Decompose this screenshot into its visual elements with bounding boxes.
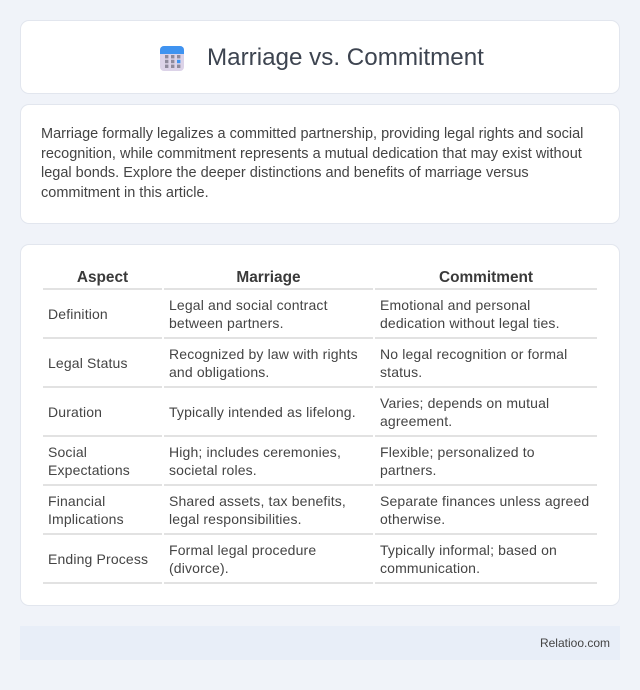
row: Legal Status: Recognized by law with rights	[169, 346, 358, 362]
title: Marriage vs. Commitment	[207, 44, 484, 71]
row: Social Expectations: Social	[48, 444, 87, 460]
intro paragraph: commitment in this article.	[41, 184, 209, 200]
row: Legal Status: status.	[380, 364, 422, 380]
row: Social Expectations	[48, 444, 535, 478]
row: Financial Implications: Financial	[48, 493, 105, 509]
row: Financial Implications	[48, 493, 589, 527]
panel: intro text	[20, 104, 620, 224]
row: Duration: Duration	[48, 404, 102, 420]
row: Ending Process	[48, 542, 557, 576]
row: Ending Process: Ending Process	[48, 551, 148, 567]
intro paragraph	[41, 126, 583, 200]
table header: Marriage	[236, 269, 301, 286]
row: Definition: Emotional and personal	[380, 297, 530, 313]
row: Financial Implications: otherwise.	[380, 511, 445, 527]
row: Financial Implications: legal responsibilities.	[169, 511, 302, 527]
row: Legal Status: No legal recognition or formal	[380, 346, 567, 362]
footer bar	[20, 626, 620, 660]
row: Legal Status: and obligations.	[169, 364, 269, 380]
row: Legal Status: Legal Status	[48, 355, 128, 371]
row: Duration: Varies; depends on mutual	[380, 395, 549, 411]
table header: Aspect	[77, 269, 128, 286]
panel: title card	[20, 20, 620, 94]
row: Definition: Legal and social contract	[169, 297, 328, 313]
row: Financial Implications: Separate finances unless agreed	[380, 493, 589, 509]
row: Financial Implications: Shared assets, tax benefits,	[169, 493, 346, 509]
row: Social Expectations: Flexible; personalized to	[380, 444, 535, 460]
row: Ending Process: communication.	[380, 560, 480, 576]
row: Duration: agreement.	[380, 413, 452, 429]
row: Definition: between partners.	[169, 315, 284, 331]
intro paragraph: legal bonds. Explore the deeper distinctions and benefits of marriage versus	[41, 165, 529, 181]
row: Definition: Definition	[48, 306, 108, 322]
row: Social Expectations: Expectations	[48, 462, 130, 478]
intro paragraph: recognition, while commitment represents a mutual dedication that may exist without	[41, 146, 582, 162]
row: Ending Process: Typically informal; based on	[380, 542, 557, 558]
row: Social Expectations: partners.	[380, 462, 437, 478]
row: Ending Process: (divorce).	[169, 560, 229, 576]
table header: Commitment	[439, 269, 533, 286]
row: Social Expectations: High; includes ceremonies,	[169, 444, 341, 460]
row: Ending Process: Formal legal procedure	[169, 542, 316, 558]
row: Duration: Typically intended as lifelong.	[169, 404, 356, 420]
footer source text: Relatioo.com	[540, 636, 610, 650]
row: Social Expectations: societal roles.	[169, 462, 257, 478]
row: Duration	[48, 395, 549, 429]
row: Financial Implications: Implications	[48, 511, 124, 527]
row: Definition	[48, 297, 560, 331]
row: Legal Status	[48, 346, 567, 380]
row: Definition: dedication without legal ties.	[380, 315, 560, 331]
intro paragraph: Marriage formally legalizes a committed partnership, providing legal rights and social	[41, 126, 583, 142]
icon: calendar	[160, 46, 184, 71]
panel: comparison table	[20, 244, 620, 606]
table header	[77, 269, 533, 286]
